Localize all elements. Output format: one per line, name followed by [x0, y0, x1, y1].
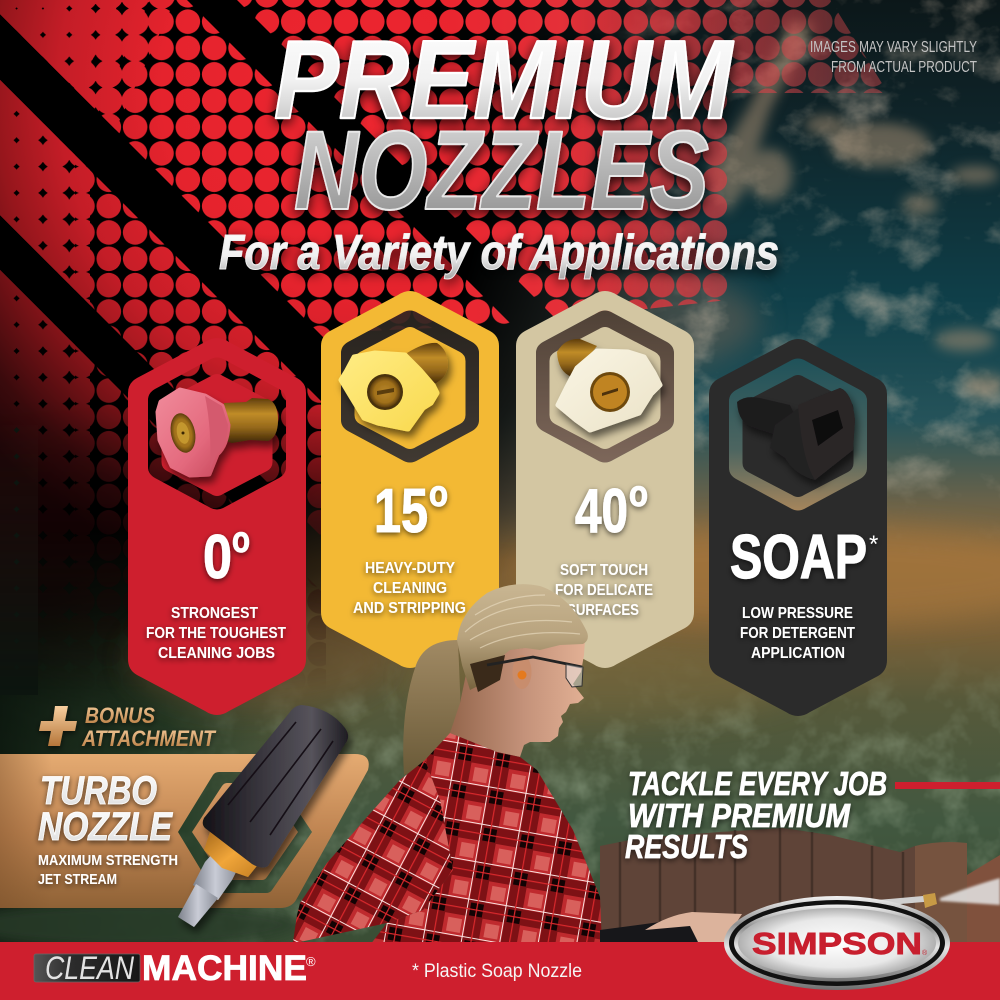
text: turbo nozzle — [38, 769, 173, 849]
hair — [457, 584, 588, 690]
description: soap: LOW PRESSURE — [742, 605, 853, 622]
label: 15 degrees: 15 — [374, 477, 428, 546]
description: soap — [740, 605, 855, 662]
description: soap: APPLICATION — [751, 645, 845, 662]
label: 0 degrees: 0 — [203, 523, 232, 592]
text: turbo nozzle: NOZZLE — [38, 805, 173, 849]
title: premium nozzles: NOZZLES — [294, 108, 709, 233]
spray gun grip — [600, 918, 698, 942]
description: 15 degrees: CLEANING — [373, 580, 447, 597]
description: 40 degrees: FOR DELICATE — [555, 582, 653, 599]
description: soap: FOR DETERGENT — [740, 625, 855, 642]
logo: simpson: SIMPSON — [752, 926, 922, 961]
card: 15 degree nozzle — [321, 291, 499, 668]
card: soap nozzle — [709, 339, 887, 716]
logo: clean machine: CLEAN — [45, 950, 135, 986]
description: 15 degrees: AND STRIPPING — [353, 600, 466, 617]
panel: turbo nozzle banner — [0, 705, 369, 927]
tagline — [625, 765, 887, 865]
tagline: RESULTS — [625, 828, 748, 865]
description: 15 degrees: HEAVY-DUTY — [365, 560, 455, 577]
disclaimer note — [810, 39, 977, 76]
logo: simpson: ® — [922, 949, 928, 957]
logo: clean machine — [34, 949, 316, 988]
description: 15 degrees — [353, 560, 466, 617]
plaid shirt sleeve — [293, 760, 453, 942]
subtitle: For a Variety of Applications — [219, 226, 779, 280]
icon: black soap nozzle — [737, 388, 855, 480]
logo: clean machine: MACHINE — [142, 949, 307, 988]
description: 40 degrees — [555, 562, 653, 619]
tagline: TACKLE EVERY JOB — [628, 765, 887, 802]
icon: yellow nozzle — [341, 343, 448, 429]
bonus attachment heading: BONUS — [85, 703, 155, 728]
logo: clean machine: ® — [306, 954, 316, 969]
dark hair under strap — [470, 655, 505, 692]
icon: white nozzle — [557, 339, 660, 430]
spray gun wand and water spray — [880, 878, 1000, 908]
footnote: * Plastic Soap Nozzle — [412, 961, 582, 982]
bottom bar — [0, 942, 1000, 1000]
ear and earplug — [512, 655, 532, 689]
text: turbo nozzle: TURBO — [40, 769, 157, 813]
label: soap: SOAP — [730, 523, 867, 592]
description: 0 degrees: CLEANING JOBS — [158, 645, 275, 662]
description: 40 degrees: SURFACES — [567, 602, 639, 619]
description: 0 degrees: FOR THE TOUGHEST — [146, 625, 286, 642]
red accent line — [895, 782, 1000, 789]
bonus attachment heading: ATTACHMENT — [81, 726, 216, 751]
label: soap: * — [869, 531, 878, 558]
photo: woman with pressure washer — [293, 584, 742, 945]
title: premium nozzles — [274, 18, 734, 233]
description: 0 degrees: STRONGEST — [171, 605, 258, 622]
text: turbo description — [38, 852, 178, 888]
logo: simpson — [724, 896, 950, 990]
label: 0 degrees — [203, 519, 250, 592]
icon: turbo nozzle — [178, 705, 348, 927]
description: 40 degrees: SOFT TOUCH — [560, 562, 648, 579]
description: 0 degrees — [146, 605, 286, 662]
title: premium nozzles: PREMIUM — [274, 18, 734, 142]
text: turbo description: MAXIMUM STRENGTH — [38, 852, 178, 869]
icon: plus — [39, 706, 77, 746]
label: 40 degrees: 40 — [575, 477, 628, 546]
plaid shirt body — [370, 733, 602, 945]
safety glasses — [487, 657, 583, 687]
hand — [645, 912, 742, 942]
label: 15 degrees: o — [429, 473, 448, 514]
neck and face — [450, 640, 585, 757]
card: 0 degree nozzle — [128, 338, 306, 715]
tagline: WITH PREMIUM — [628, 797, 851, 834]
text: turbo description: JET STREAM — [38, 871, 117, 888]
label: 0 degrees: o — [232, 519, 250, 560]
halftone red dot bands — [0, 0, 882, 662]
hair strands — [465, 595, 580, 648]
icon: pink nozzle — [158, 390, 278, 475]
label: 40 degrees: o — [629, 473, 648, 514]
ponytail — [403, 640, 460, 775]
card: 40 degree nozzle — [516, 291, 694, 668]
wooden fence — [600, 828, 1000, 945]
bonus attachment heading — [39, 703, 216, 751]
